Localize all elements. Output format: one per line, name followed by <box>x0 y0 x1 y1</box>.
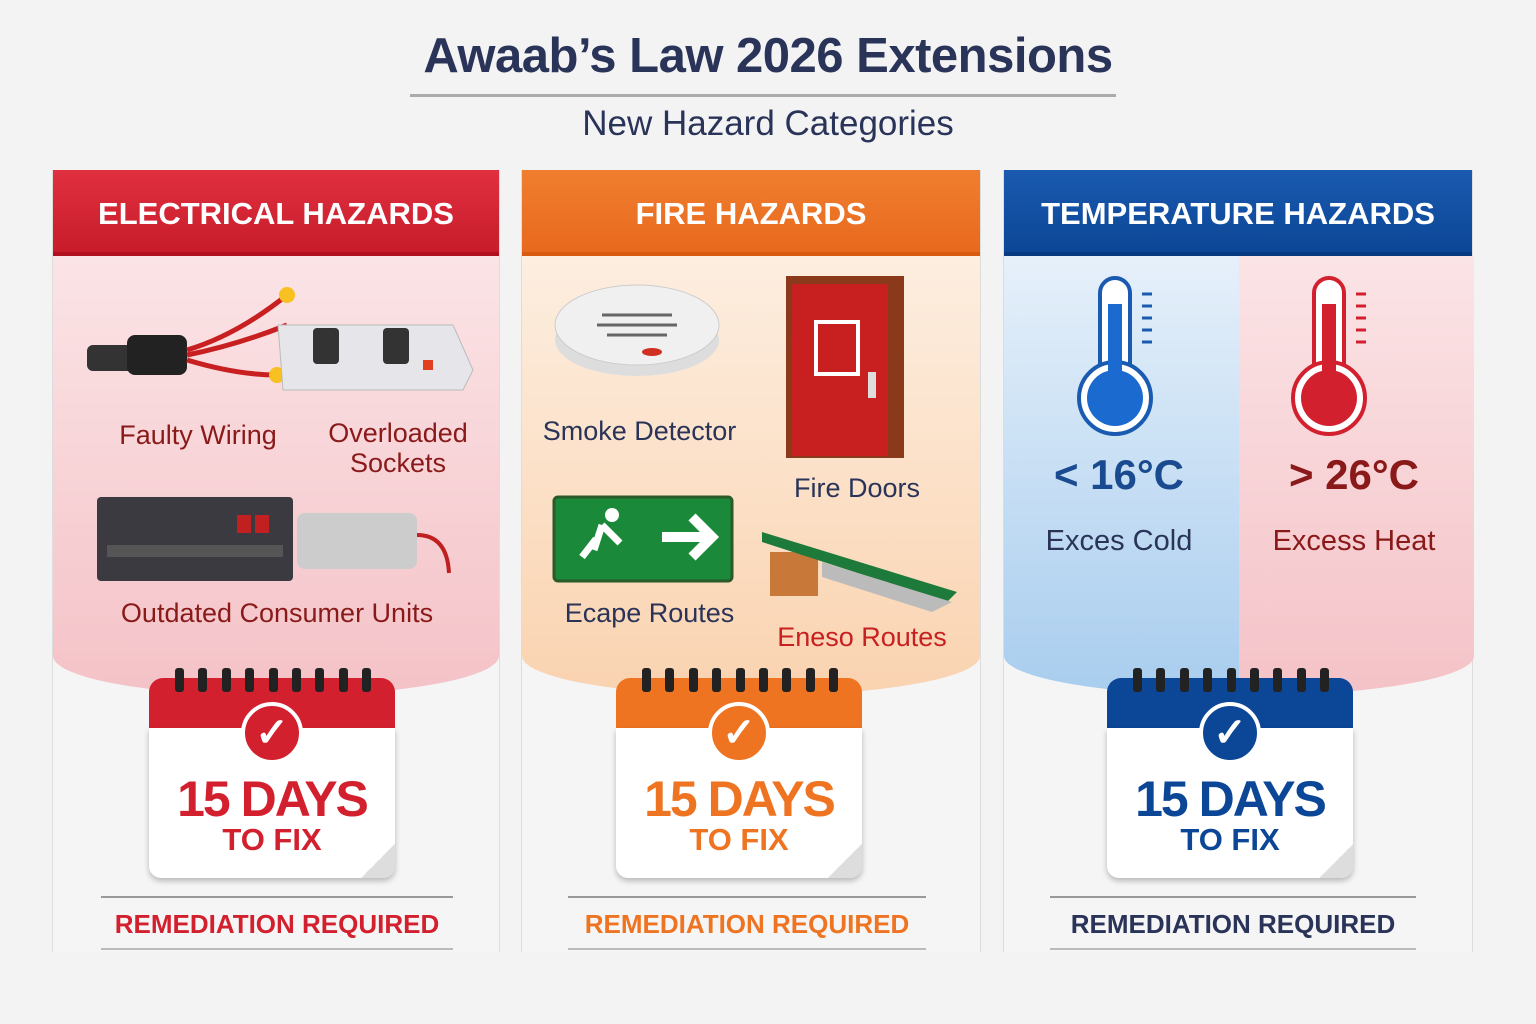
icon: fire door <box>786 276 904 458</box>
icon: escape route sign <box>552 496 734 582</box>
icon: faulty wiring <box>87 287 295 383</box>
label: overloaded sockets <box>328 418 468 478</box>
calendar: 15 days blue: 15 DAYS <box>1135 771 1325 827</box>
calendar: 15 days red <box>146 668 398 884</box>
calendar: 15 days orange: TO FIX <box>689 822 789 857</box>
panel body background <box>522 256 980 696</box>
heading: electrical <box>53 170 499 256</box>
heading: fire <box>522 170 980 256</box>
footer: remediation required <box>568 896 926 950</box>
cold body background <box>1004 256 1239 696</box>
footer: remediation required <box>1050 896 1416 950</box>
value: above 26 C: > 26°C <box>1289 451 1419 498</box>
footer: remediation required: REMEDIATION REQUIRED <box>115 909 439 939</box>
label: faulty wiring: Faulty Wiring <box>119 420 277 450</box>
icon: hot thermometer <box>1291 276 1367 436</box>
heat body background <box>1239 256 1474 696</box>
calendar: 15 days orange: 15 DAYS <box>644 771 834 827</box>
calendar: 15 days blue: ✓ <box>1213 711 1247 755</box>
footer: remediation required: REMEDIATION REQUIRED <box>1071 909 1395 939</box>
calendar: 15 days red: 15 DAYS <box>177 771 367 827</box>
heading: temperature <box>1004 170 1472 256</box>
label: overloaded sockets: Sockets <box>350 448 446 478</box>
icon: route strip <box>762 532 957 612</box>
icon: smoke detector <box>554 284 720 376</box>
heading: fire: FIRE HAZARDS <box>636 196 866 231</box>
label: escape routes: Ecape Routes <box>565 598 734 628</box>
panel: temperature hazards <box>1003 170 1473 952</box>
label: excess heat: Excess Heat <box>1273 525 1435 557</box>
label: excess cold: Exces Cold <box>1046 525 1192 557</box>
footer: remediation required <box>101 896 453 950</box>
calendar: 15 days orange: ✓ <box>722 711 756 755</box>
label: eneso routes: Eneso Routes <box>777 622 947 652</box>
panel: electrical hazards <box>52 170 500 952</box>
title underline <box>410 94 1116 97</box>
calendar: 15 days blue <box>1104 668 1356 884</box>
heading: electrical: ELECTRICAL HAZARDS <box>98 196 454 231</box>
footer: remediation required: REMEDIATION REQUIRED <box>585 909 909 939</box>
panel: fire hazards <box>521 170 981 952</box>
subtitle: New Hazard Categories <box>582 104 954 143</box>
icon: cold thermometer <box>1077 276 1153 436</box>
calendar: 15 days blue: TO FIX <box>1180 822 1280 857</box>
label: fire doors: Fire Doors <box>794 473 920 503</box>
icon: overloaded sockets <box>278 324 474 390</box>
calendar: 15 days red: ✓ <box>255 711 289 755</box>
calendar: 15 days orange <box>613 668 865 884</box>
panel body background <box>53 256 499 696</box>
calendar: 15 days red: TO FIX <box>222 822 322 857</box>
label: outdated consumer units: Outdated Consumer Units <box>121 598 433 628</box>
value: below 16 C: < 16°C <box>1054 451 1184 498</box>
title: Awaab’s Law 2026 Extensions <box>423 29 1113 83</box>
label: smoke detector: Smoke Detector <box>543 416 736 446</box>
heading: temperature: TEMPERATURE HAZARDS <box>1041 196 1435 231</box>
label: overloaded sockets: Overloaded <box>328 418 468 448</box>
icon: consumer units <box>97 497 451 581</box>
